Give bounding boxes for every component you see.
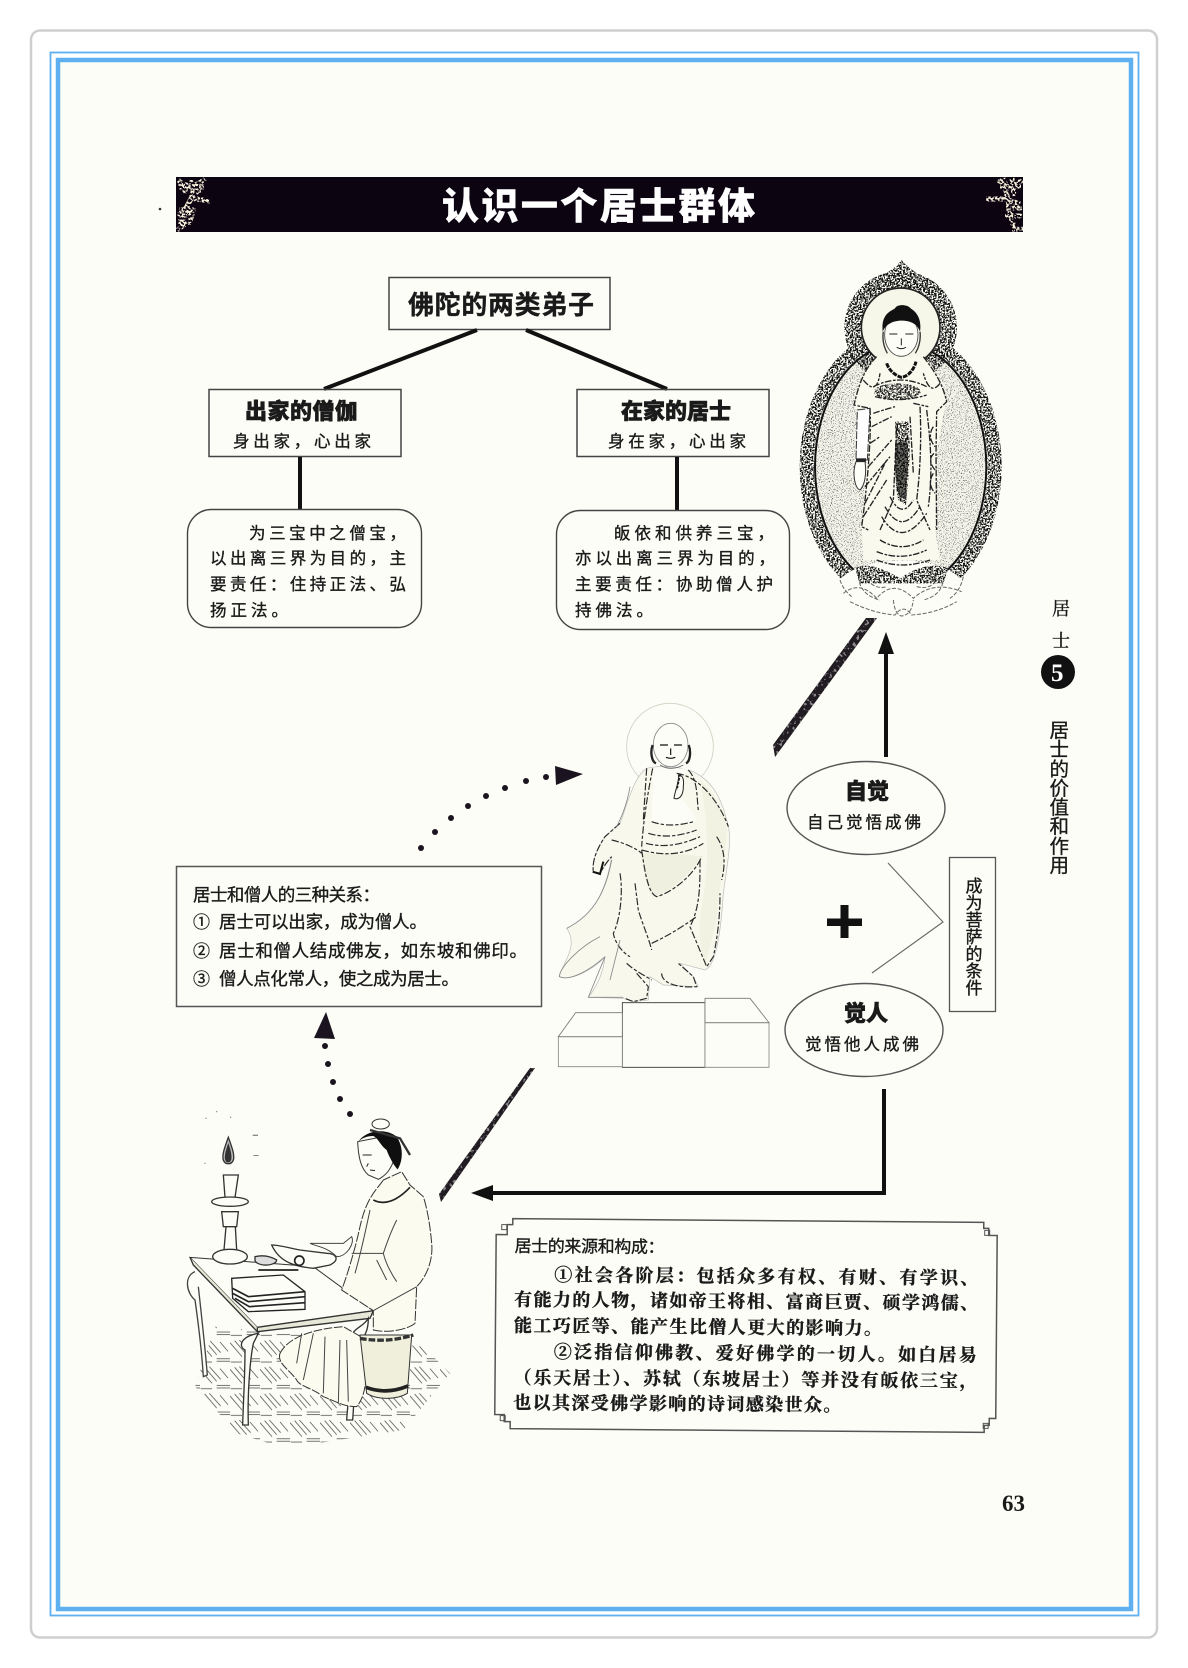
- panel: lay practitioner description: 亦以出离三界为目的，: [575, 549, 775, 568]
- banner ornament left: [177, 179, 210, 230]
- panel: sangha description: [188, 510, 422, 628]
- panel: three relations between lay people and monks: 居士可以出家，成为僧人。: [219, 912, 427, 932]
- panel: origin and composition of lay followers: 有能力的人物，诸如帝王将相、富商巨贾、硕学鸿儒、: [514, 1289, 978, 1314]
- title text: 认识一个居士群体: [442, 186, 755, 227]
- panel: lay practitioner heading: 在家的居士: [621, 399, 731, 424]
- panel: three relations between lay people and monks: 僧人点化常人，使之成为居士。: [219, 969, 459, 989]
- floor pattern: [195, 1327, 450, 1447]
- panel: origin and composition of lay followers: （乐天居士）、苏轼（东坡居士）等并没有皈依三宝，: [513, 1367, 978, 1392]
- panel: lay practitioner description: [556, 510, 790, 630]
- section tab on right edge: 和: [1050, 816, 1069, 838]
- oval: awakening others: [785, 984, 943, 1076]
- oval: self-awakening: 自己觉悟成佛: [807, 813, 921, 832]
- arrow: up to Buddha: [878, 632, 894, 757]
- box: the two kinds of disciples: 佛陀的两类弟子: [408, 290, 594, 320]
- section tab on right edge: 作: [1050, 836, 1069, 858]
- connector lines to detail boxes: [298, 457, 679, 510]
- illustration: standing monk on pedestal: [558, 703, 769, 1067]
- panel: three relations between lay people and monks: ③: [193, 970, 210, 989]
- panel: origin and composition of lay followers: ①社会各阶层：包括众多有权、有财、有学识、: [554, 1264, 978, 1288]
- section tab on right edge: 士: [1050, 739, 1069, 761]
- box: conditions to become a bodhisattva: 成: [966, 877, 982, 896]
- section tab on right edge: 居: [1050, 720, 1069, 742]
- connector lines from top box: [324, 330, 667, 389]
- panel: lay practitioner description: 持佛法。: [575, 601, 653, 620]
- box: conditions to become a bodhisattva: 件: [966, 979, 982, 998]
- box: conditions to become a bodhisattva: 的: [966, 945, 982, 964]
- candle: [212, 1137, 248, 1264]
- panel: monastic sangha heading: [209, 390, 401, 456]
- panel: three relations between lay people and monks: ②: [193, 942, 210, 961]
- illustration: standing Buddha with aureole: [807, 260, 995, 619]
- panel: origin and composition of lay followers: 居士的来源和构成：: [515, 1237, 665, 1257]
- panel: lay practitioner heading: 身在家，心出家: [608, 432, 746, 451]
- panel: sangha description: 为三宝中之僧宝，: [249, 524, 406, 543]
- banner ornament right: [986, 178, 1023, 229]
- section tab on right edge: 值: [1050, 797, 1069, 819]
- panel: three relations between lay people and monks: ①: [193, 913, 210, 932]
- oval: awakening others: 觉悟他人成佛: [805, 1035, 919, 1054]
- box: conditions to become a bodhisattva: 菩: [966, 911, 982, 930]
- arrow: from awakening others to lay person: [471, 1089, 886, 1201]
- section tab on right edge: [1041, 599, 1075, 877]
- section tab on right edge: 价: [1050, 778, 1069, 800]
- page number: 63: [1002, 1491, 1025, 1516]
- box: conditions to become a bodhisattva: 条: [966, 962, 982, 981]
- dotted curved arrow: to monk: [418, 766, 583, 851]
- section tab on right edge: 的: [1050, 759, 1069, 781]
- panel: monastic sangha heading: 身出家，心出家: [233, 432, 371, 451]
- section tab on right edge: 5: [1051, 660, 1064, 687]
- section tab on right edge: 用: [1050, 855, 1069, 877]
- panel: lay practitioner description: 皈依和供养三宝，: [614, 524, 774, 543]
- section tab on right edge: 居: [1052, 599, 1070, 619]
- box: conditions to become a bodhisattva: 萨: [966, 928, 982, 947]
- diagonal divider band lower: [439, 1068, 535, 1202]
- table: [187, 1257, 373, 1425]
- panel: origin and composition of lay followers: 也以其深受佛学影响的诗词感染世众。: [513, 1392, 841, 1415]
- oval: self-awakening: 自觉: [845, 779, 889, 804]
- title banner: [159, 177, 1023, 232]
- books: [232, 1275, 305, 1312]
- oval: self-awakening: [787, 762, 945, 854]
- illustration: lay scholar reading at a table: [187, 1111, 450, 1447]
- section tab on right edge: 士: [1052, 631, 1070, 651]
- person: [272, 1119, 432, 1407]
- plus sign: [827, 905, 862, 938]
- panel: three relations between lay people and monks: 居士和僧人结成佛友，如东坡和佛印。: [219, 941, 527, 961]
- diagonal divider band upper: [773, 618, 877, 757]
- box: conditions to become a bodhisattva: [950, 858, 996, 1012]
- panel: three relations between lay people and monks: [176, 866, 542, 1006]
- panel: sangha description: 以出离三界为目的，主: [210, 549, 406, 568]
- panel: sangha description: 扬正法。: [210, 601, 288, 620]
- oval: awakening others: 觉人: [844, 1001, 888, 1026]
- panel: lay practitioner description: 主要责任：协助僧人护: [575, 575, 773, 594]
- panel: monastic sangha heading: 出家的僧伽: [245, 399, 357, 424]
- panel: origin and composition of lay followers: 能工巧匠等、能产生比僧人更大的影响力。: [514, 1315, 882, 1339]
- panel: sangha description: 要责任：住持正法、弘: [210, 575, 406, 594]
- panel: lay practitioner heading: [577, 390, 769, 456]
- box: conditions to become a bodhisattva: 为: [966, 894, 982, 913]
- panel: origin and composition of lay followers: ②泛指信仰佛教、爱好佛学的一切人。如白居易: [554, 1341, 977, 1365]
- dotted curved arrow: to relations panel: [314, 1012, 353, 1117]
- box: the two kinds of disciples: [389, 278, 610, 330]
- panel: three relations between lay people and monks: 居士和僧人的三种关系：: [193, 885, 380, 905]
- chevron pointing to conditions: [872, 863, 943, 973]
- panel: origin and composition of lay followers: [495, 1219, 997, 1432]
